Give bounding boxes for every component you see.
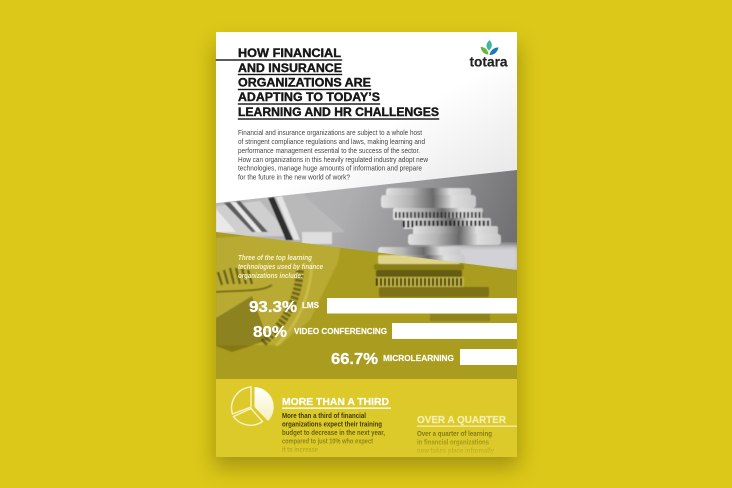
banknote [216, 192, 345, 244]
logo: totara [470, 40, 508, 70]
panel: header [216, 32, 517, 207]
bar chart [249, 298, 517, 368]
finding: over a quarter: now takes place informally [417, 448, 494, 455]
intro paragraph: Financial and insurance organizations are subject to a whole host [238, 128, 422, 137]
finding: over a quarter: in financial organizations [417, 440, 489, 446]
infographic poster scene [204, 32, 530, 478]
photo: coins and banknote [216, 170, 517, 270]
intro to chart [238, 253, 323, 280]
finding: more than a third: compared to just 10% who expect [282, 438, 374, 446]
title: ORGANIZATIONS ARE [238, 76, 371, 90]
finding: over a quarter [417, 414, 517, 455]
bar: LMS: LMS [302, 301, 320, 310]
text fade [282, 426, 517, 454]
bar: microlearning: 66.7% [331, 351, 378, 368]
bar: LMS [249, 298, 517, 316]
intro to chart: organizations include: [238, 271, 303, 280]
finding: more than a third: budget to decrease in the next year, [282, 430, 385, 437]
finding: over a quarter: Over a quarter of learning [417, 431, 492, 438]
finding: more than a third: MORE THAN A THIRD [282, 396, 389, 408]
title: LEARNING AND HR CHALLENGES [238, 105, 439, 119]
panel: key findings [216, 379, 517, 457]
finding: more than a third: More than a third of financial [282, 413, 366, 420]
title: HOW FINANCIAL [238, 46, 341, 60]
bar: video conferencing: 80% [253, 324, 287, 341]
page shadow [214, 44, 519, 468]
finding: more than a third: organizations expect their training [282, 422, 382, 428]
intro to chart: technologies used by finance [238, 262, 323, 271]
intro paragraph: for the future in the new world of work? [238, 172, 350, 182]
finding: over a quarter: OVER A QUARTER [417, 414, 506, 426]
intro paragraph: of stringent compliance regulations and laws, making learning and [238, 137, 425, 146]
bar: microlearning [331, 349, 517, 368]
logo: totara: totara [470, 54, 508, 70]
intro paragraph: performance management essential to the success of the sector. [238, 146, 420, 155]
finding: more than a third [282, 396, 391, 454]
intro paragraph [238, 128, 429, 182]
title: ADAPTING TO TODAY’S [238, 90, 380, 104]
bar: LMS: 93.3% [249, 299, 297, 316]
title: AND INSURANCE [238, 61, 342, 75]
coin stack [378, 188, 501, 264]
icon: pie chart [232, 387, 274, 425]
intro paragraph: technologies, manage huge amounts of information and prepare [238, 164, 422, 172]
finding: more than a third: it to increase [282, 447, 318, 454]
intro paragraph: How can organizations in this heavily regulated industry adopt new [238, 155, 429, 164]
bar: video conferencing: VIDEO CONFERENCING [294, 327, 387, 336]
bar: video conferencing [253, 323, 517, 341]
photo detail under overlay [216, 232, 490, 352]
intro to chart: Three of the top learning [238, 253, 312, 262]
panel: statistics overlay [216, 232, 517, 379]
bar: microlearning: MICROLEARNING [383, 354, 454, 363]
title [216, 46, 439, 120]
